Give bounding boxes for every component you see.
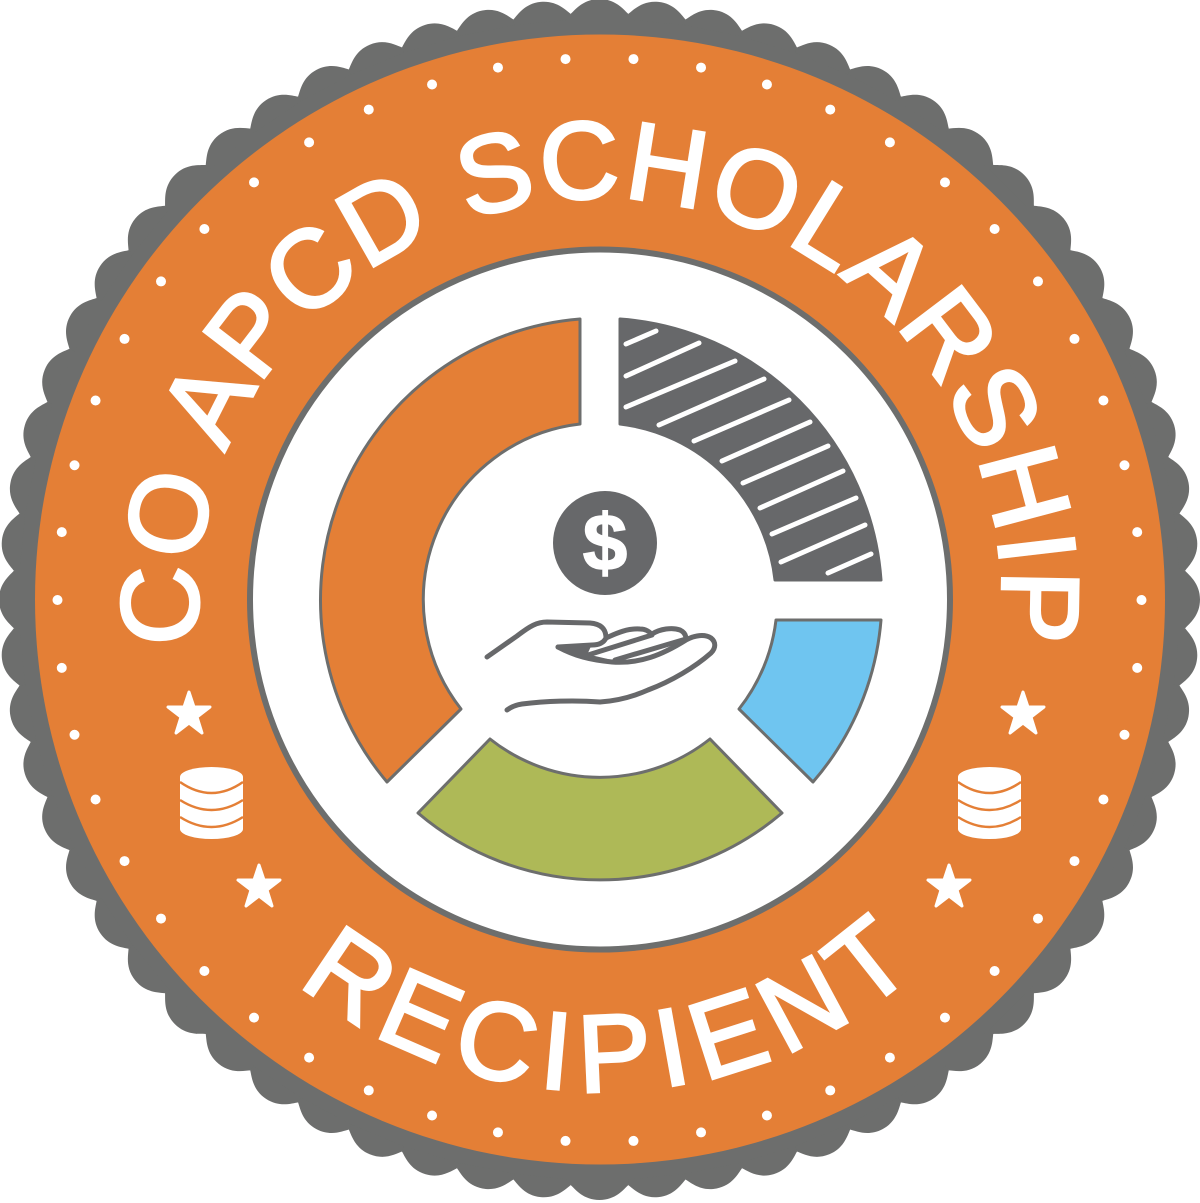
icon: stars — [168, 692, 1044, 906]
icon: left coin stack — [180, 767, 243, 839]
icon: dollar coin — [553, 491, 657, 595]
heading: CO APCD SCHOLARSHIP: CO APCD SCHOLARSHIP — [120, 120, 1080, 642]
segment: hatched grey — [620, 319, 881, 580]
segment: orange — [320, 319, 580, 782]
icon: open hand — [487, 622, 715, 710]
white centre disc — [250, 250, 950, 950]
icon: right coin stack — [958, 767, 1021, 839]
icon: dollar coin: $ — [583, 498, 627, 587]
segment: green — [418, 739, 782, 880]
heading: RECIPIENT: RECIPIENT — [302, 911, 897, 1094]
donut chart — [320, 319, 881, 880]
segment: blue — [739, 620, 881, 782]
